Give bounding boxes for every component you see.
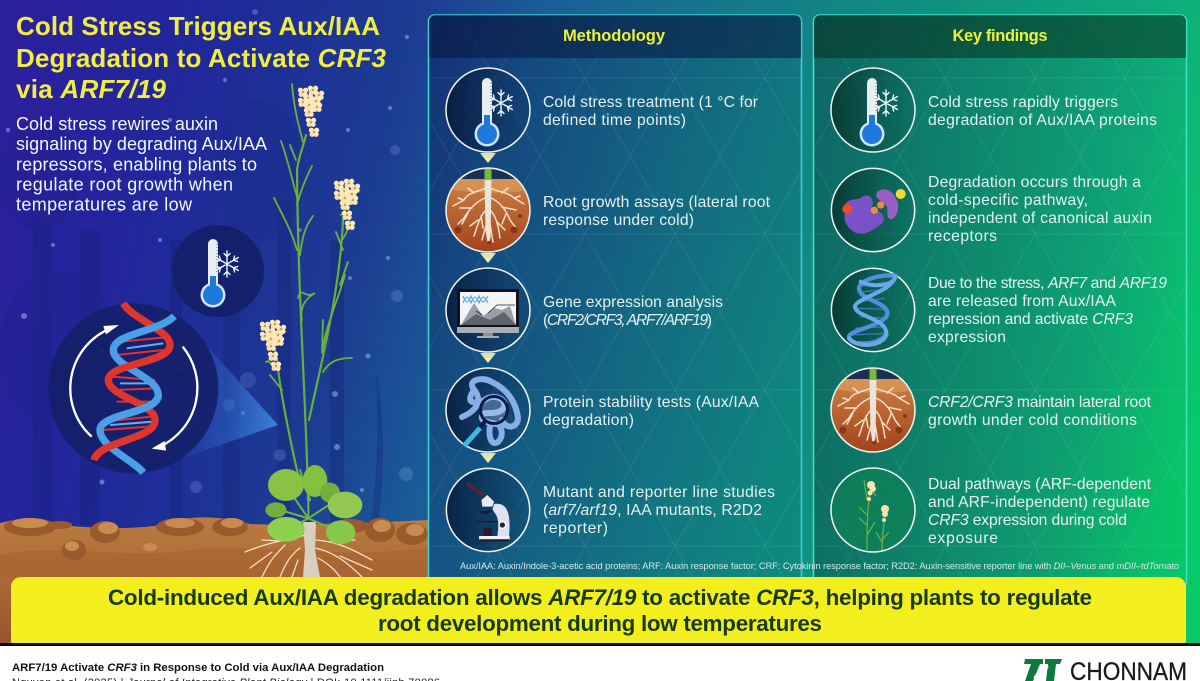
text: gene expression: Gene expression analysis [543, 294, 723, 311]
snow particles [6, 9, 413, 493]
magnifying cone [177, 345, 278, 460]
heading: key findings: Key findings [952, 27, 1048, 45]
subtitle: regulate root growth when [16, 174, 233, 194]
title: Degradation to Activate CRF3 [16, 43, 387, 73]
citation: ARF7/19 Activate CRF3 in Response to Cold via Aux/IAA Degradation [12, 662, 384, 674]
text: root growth assays: response under cold) [543, 212, 694, 229]
text: dual pathways: and ARF-independent) regulate [928, 494, 1150, 511]
subtitle [16, 114, 267, 214]
subtitle: signaling by degrading Aux/IAA [16, 134, 267, 154]
text: cold-specific pathway: receptors [928, 228, 997, 245]
text: dual pathways: exposure [928, 530, 998, 547]
text: lateral root growth [928, 394, 1152, 429]
icon: thermometer [446, 68, 530, 152]
icon: protein complex [831, 168, 915, 252]
text: dual pathways: CRF3 expression during cold [928, 512, 1127, 529]
text: cold stress treatment: Cold stress treatment (1 °C for [543, 94, 758, 111]
text: cold-specific pathway [928, 174, 1152, 245]
icon: monitor with chart [446, 268, 530, 352]
arrow [480, 153, 496, 163]
soil ground [0, 517, 428, 645]
icon: DNA with rotating arrows [48, 303, 218, 473]
stem leaves [266, 84, 352, 390]
text: cold-specific pathway: cold-specific pathway, [928, 192, 1088, 209]
text: rapid degradation: degradation of Aux/IAA proteins [928, 112, 1157, 129]
text: dual pathways [928, 476, 1152, 547]
text: mutant and reporter: (arf7/arf19, IAA mutants, R2D2 [543, 502, 762, 519]
conclusion banner: Cold-induced Aux/IAA degradation allows ARF7/19 to activate CRF3, helping plants to regulate [108, 585, 1092, 610]
forest silhouette [0, 100, 383, 525]
text: mutant and reporter [543, 484, 775, 537]
title: via ARF7/19 [16, 74, 167, 104]
text: protein stability: degradation) [543, 412, 634, 429]
panel: key findings [814, 15, 1186, 585]
text: protein stability [543, 394, 760, 429]
text: protein stability: Protein stability tests (Aux/IAA [543, 394, 760, 411]
icon: thermometer [831, 68, 915, 152]
text: ARF7 and ARF19: Due to the stress, ARF7 and ARF19 [928, 275, 1167, 292]
arrow [480, 353, 496, 363]
text: rapid degradation: Cold stress rapidly triggers [928, 94, 1118, 111]
footer divider [0, 643, 1200, 646]
plant [245, 84, 372, 577]
stems [274, 135, 346, 500]
title: Cold Stress Triggers Aux/IAA [16, 11, 380, 41]
rosette leaves [265, 465, 362, 544]
text: root growth assays [543, 194, 771, 229]
text: cold stress treatment [543, 94, 758, 129]
conclusion banner: root development during low temperatures [378, 611, 822, 636]
text: ARF7 and ARF19: expression [928, 329, 1006, 346]
icon: roots [446, 168, 530, 252]
icon: microscope [446, 468, 530, 552]
conclusion banner [11, 577, 1186, 643]
text: cold-specific pathway: independent of canonical auxin [928, 210, 1152, 227]
text: ARF7 and ARF19 [928, 275, 1167, 346]
text: gene expression [543, 294, 723, 329]
arrow [480, 253, 496, 263]
text: ARF7 and ARF19: repression and activate CRF3 [928, 311, 1133, 328]
text: rapid degradation [928, 94, 1157, 129]
icon: roots [831, 368, 915, 452]
subtitle: Cold stress rewires auxin [16, 114, 218, 134]
panel: methodology [428, 15, 802, 585]
title [16, 11, 387, 104]
flowers [298, 86, 324, 137]
text: cold stress treatment: defined time points) [543, 112, 686, 129]
text: dual pathways: Dual pathways (ARF-dependent [928, 476, 1152, 493]
icon: DNA [831, 268, 915, 352]
subtitle: repressors, enabling plants to [16, 154, 257, 174]
text: lateral root growth: CRF2/CRF3 maintain lateral root [928, 394, 1152, 411]
icon: protein with magnifier [446, 368, 530, 452]
heading: methodology: Methodology [563, 27, 666, 45]
logo: Chonnam [1024, 658, 1187, 681]
text: lateral root growth: growth under cold conditions [928, 412, 1137, 429]
text: gene expression: (CRF2/CRF3, ARF7/ARF19) [543, 312, 712, 329]
text: root growth assays: Root growth assays (lateral root [543, 194, 771, 211]
citation [12, 662, 440, 681]
text: ARF7 and ARF19: are released from Aux/IAA [928, 293, 1117, 310]
footnote: Aux/IAA: Auxin/Indole-3-acetic acid proteins; ARF: Auxin response factor; CRF: Cytokinin response factor; R2D2: Auxin-sensitive reporter line with DII–Venus and mDII–tdTomato [460, 561, 1179, 571]
roots of plant [245, 535, 372, 577]
text: cold-specific pathway: Degradation occurs through a [928, 174, 1141, 191]
arrow [480, 453, 496, 463]
subtitle: temperatures are low [16, 194, 193, 214]
icon: thermometer circle [172, 225, 264, 317]
text: mutant and reporter: Mutant and reporter line studies [543, 484, 775, 501]
text: mutant and reporter: reporter) [543, 520, 608, 537]
icon: plants [831, 468, 915, 552]
